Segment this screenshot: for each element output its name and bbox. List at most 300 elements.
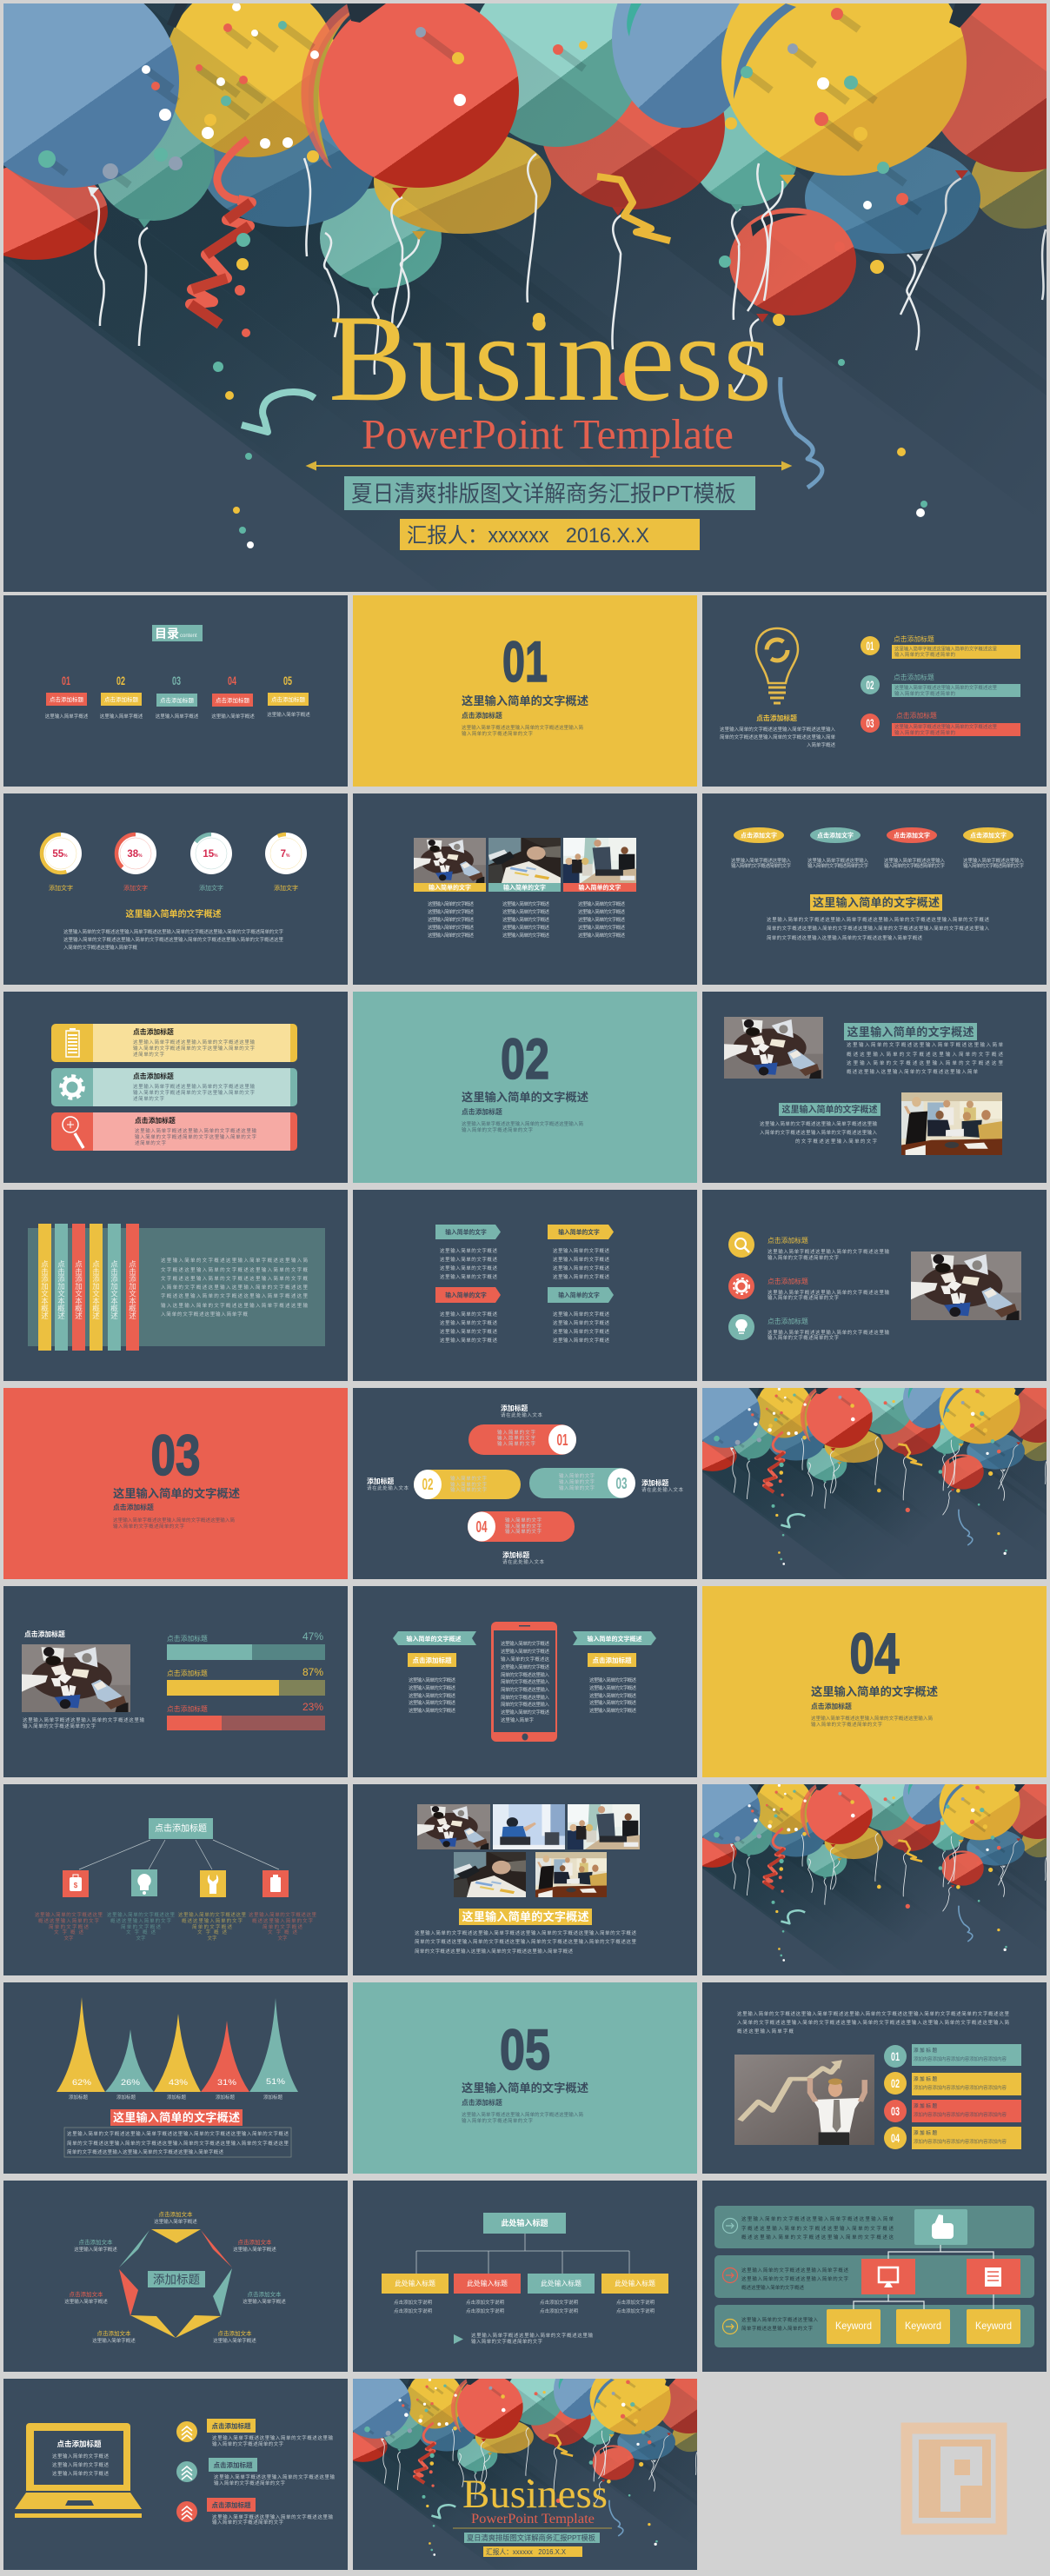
section text: 这里输入简单字概述这里输入简单的文字概述这里输入简 (462, 1120, 583, 1127)
strip 2: 点击添加文本概述 (57, 1260, 66, 1320)
peak 62%: 62% (72, 2078, 92, 2088)
body text: 入简单的文字概述这里输入简单字概 (161, 1311, 248, 1318)
label lower right: 点击添加文本 (247, 2290, 282, 2298)
tag group bottom left: 输入简单的文字 (445, 1291, 487, 1298)
item 03: 添加标题 (914, 2102, 937, 2109)
panel: contents slide (3, 595, 348, 787)
panel: icons with photo (702, 1190, 1047, 1381)
pill 01: 01 (556, 1431, 568, 1449)
laptop text (52, 2440, 109, 2477)
phone text: 这里输入简单的文字概述 (501, 1663, 549, 1670)
tag group bottom right: 输入简单的文字 (558, 1291, 600, 1298)
subtitle banner: 夏日清爽排版图文详解商务汇报PPT模板 (351, 481, 736, 507)
box 1: 点击添加文字说明 (394, 2299, 432, 2306)
item 1: 点击添加标题 (212, 2421, 251, 2430)
bar 47%: 47% (302, 1630, 323, 1643)
arrow circle 3 (723, 2319, 737, 2334)
pill 02 (414, 1470, 521, 1499)
item 03 (884, 2100, 1021, 2122)
ring 7%: 7% (281, 849, 290, 860)
strip 4 (90, 1224, 103, 1351)
phone text: 这里输入简单的文字概述 (501, 1648, 549, 1655)
panel: balloon divider 2 (688, 1767, 1050, 1975)
panel: three photos (353, 793, 697, 985)
oval item 1: 这里输入简单字概述这里输入 (731, 857, 791, 864)
oval item 3: 输入简单的文字概述简单的文字 (884, 862, 945, 869)
text column 4: 文字概述 (268, 1929, 297, 1935)
list item 2: 点击添加标题 (894, 673, 934, 681)
strip 6 (126, 1224, 139, 1351)
label left (367, 1477, 409, 1491)
icon: gear (61, 1076, 83, 1099)
text column 1: 文字 (63, 1935, 74, 1942)
panel: two photos with text (702, 992, 1047, 1183)
closing divider (453, 2527, 612, 2529)
arrow circle 1 (723, 2218, 737, 2234)
label lower right: 这里输入简单字概述 (243, 2298, 286, 2305)
peak 26%: 添加标题 (116, 2094, 136, 2101)
keyword box 3 (967, 2309, 1020, 2344)
list item 2: 02 (866, 678, 874, 692)
list item 3: 这里输入简单字概述这里输入简单的文字概述这里 (894, 723, 997, 730)
list item 3 (861, 711, 1020, 736)
closing subtitle: PowerPoint Template (471, 2512, 595, 2526)
section text: 输入简单的文字概述简单的文字 (462, 2117, 533, 2124)
contents item 4: 这里输入简单字概述 (211, 713, 255, 720)
closing title: Business (462, 2472, 608, 2517)
contents heading: 目录 (155, 627, 179, 641)
icon: light bulb (756, 628, 798, 703)
arrow marker (454, 2334, 463, 2344)
phone text: 简单的文字概述这里输入 (501, 1694, 549, 1701)
contents item 5: 这里输入简单字概述 (267, 711, 310, 718)
panel: three cards (3, 992, 348, 1183)
item 02: 添加标题 (914, 2075, 937, 2082)
row text 1: 字概述这里输入简单的文字概述这里输入简单的文字概述 (741, 2225, 894, 2232)
contents item 2: 这里输入简单字概述 (100, 713, 143, 720)
connector lines (416, 2234, 629, 2274)
title: Business (329, 289, 772, 427)
photo column 1 (414, 838, 486, 939)
body text 2: 这里输入简单的文字概述这里输入简单字概述这里输 (760, 1120, 877, 1127)
tag group bottom left: 这里输入简单的文字概述 (440, 1328, 497, 1335)
body text (415, 1929, 636, 1955)
item 2: 点击添加标题 (768, 1277, 808, 1285)
box 4: 点击添加文字说明 (616, 2299, 655, 2306)
label top: 请在此处输入文本 (501, 1411, 542, 1418)
row text 3: 简单字概述这里输入简单的文字 (741, 2325, 813, 2332)
item 04: 添加内容添加内容添加内容添加内容添加内容 (914, 2138, 1007, 2145)
item 04: 04 (891, 2131, 900, 2145)
item 04 (884, 2127, 1021, 2149)
body text (767, 916, 989, 941)
list item 3: 输入简单的文字概述简单的 (894, 729, 955, 736)
item 3: 这里输入简单字概述这里输入简单的文字概述这里输 (768, 1329, 889, 1336)
keyword box 1 (827, 2309, 881, 2344)
text column 2: 文字概述 (126, 1929, 156, 1935)
item 1: 输入简单的文字概述简单的文字 (768, 1254, 839, 1261)
tag group top right: 这里输入简单的文字概述 (553, 1265, 609, 1271)
star shape (119, 2229, 232, 2338)
text column 3 (178, 1911, 246, 1942)
ring 7% (265, 833, 307, 874)
panel: org chart (353, 2181, 697, 2372)
contents item 2 (100, 674, 143, 720)
presenter banner (400, 519, 700, 550)
body text: 入简单的文字概述这里输入简单字概 (63, 944, 137, 951)
top box (149, 1818, 213, 1839)
body text: 这里输入简单的文字概述这里输入简单的文字概述这里输入简单的文字概述这里输入简单的文字概述这里 (63, 936, 283, 943)
oval item 1: 输入简单的文字概述简单的文字 (731, 862, 791, 869)
item 02: 添加内容添加内容添加内容添加内容添加内容 (914, 2084, 1007, 2091)
body text: 简单的文字概述这里输入简单的文字概述这里输入简单的文字概述这里输入简单的文字概述这里输入 (767, 925, 989, 932)
item 02 (884, 2072, 1021, 2095)
body text (63, 928, 283, 951)
body text: 这里输入简单的文字概述这里输入简单字概述这里输入简单的文字概述这里输入简单的文字概述 (415, 1929, 636, 1936)
label upper left: 点击添加文本 (78, 2238, 113, 2246)
right ribbon: 输入简单的文字概述 (588, 1635, 641, 1643)
tag group bottom right: 这里输入简单的文字概述 (553, 1311, 609, 1318)
panel: four pills (353, 1388, 697, 1579)
photo column 3: 这里输入简单的文字概述 (578, 924, 625, 931)
strip 2 (55, 1224, 68, 1351)
body text: 概述这里输入简单的文字概述这里输入简单的文字概述 (847, 1051, 1003, 1058)
right ribbon (573, 1631, 656, 1645)
arrow divider (308, 462, 790, 469)
label bottom right: 这里输入简单字概述 (213, 2337, 256, 2344)
panel: closing slide (339, 2361, 763, 2570)
body text: 简单的文字概述这里输入这里输入简单的文字概述这里输入简单字概述 (415, 1948, 573, 1955)
arrow circle 2 (723, 2268, 737, 2282)
panel: section 05 (353, 1982, 697, 2174)
right column: 这里输入简单的文字概述 (589, 1707, 636, 1714)
section text (811, 1715, 933, 1728)
photo column 1: 这里输入简单的文字概述 (428, 924, 474, 931)
photo: meeting table (911, 1251, 1021, 1320)
laptop text: 这里输入简单的文字概述 (52, 2461, 109, 2468)
text column 3: 这里输入简单的文字概述这里 (178, 1911, 246, 1918)
strip 6: 点击添加文本概述 (129, 1260, 137, 1320)
text column 4: 概述这里输入简单的文字 (252, 1917, 313, 1924)
row text 2 (741, 2267, 848, 2291)
card 1: 输入简单的文字概述简单的文字这里输入简单的文字 (133, 1045, 255, 1052)
contents item 5: 点击添加标题 (271, 695, 306, 703)
section heading: 这里输入简单的文字概述 (811, 1684, 938, 1698)
box 1: 点击添加文字说明 (394, 2307, 432, 2314)
item 3: 输入简单的文字概述简单的文字 (212, 2519, 283, 2526)
oval item 2: 这里输入简单字概述这里输入 (807, 857, 868, 864)
card 3: 述简单的文字 (135, 1139, 166, 1146)
phone text: 简单的文字概述这里输入 (501, 1678, 549, 1685)
left column: 这里输入简单的文字概述 (409, 1699, 455, 1706)
item 02: 02 (891, 2076, 900, 2090)
text column 3: 简单的文字概述 (192, 1923, 232, 1930)
photo text: 输入简单的文字概述简单的文字 (23, 1723, 96, 1730)
item 01: 添加标题 (914, 2047, 937, 2054)
panel: percentage rings (3, 793, 348, 985)
section text: 这里输入简单字概述这里输入简单的文字概述这里输入简 (113, 1517, 235, 1524)
item 3 (728, 1314, 889, 1341)
footnote text: 这里输入简单字概述这里输入简单的文字概述这里输 (471, 2332, 593, 2339)
icon box: money bag (63, 1870, 89, 1897)
heading banner: 这里输入简单的文字概述 (813, 896, 940, 909)
section text (462, 2111, 583, 2124)
list item 2: 这里输入简单字概述这里输入简单的文字概述这里 (894, 684, 997, 691)
label bottom: 添加标题 (502, 1550, 529, 1559)
icon box: bulb (131, 1869, 157, 1896)
body text: 简单的文字概述这里输入这里输入简单的文字概述这里输入简单字概述 (767, 934, 922, 941)
left column: 这里输入简单的文字概述 (409, 1692, 455, 1699)
body text: 这里输入简单的文字概述这里输入简单字概述这里输入简 (161, 1257, 308, 1264)
peak 26%: 26% (121, 2078, 141, 2088)
panel: star diagram (3, 2181, 348, 2372)
peak 51% (249, 1998, 298, 2101)
section text: 输入简单的文字概述简单的文字 (462, 1126, 533, 1133)
section heading: 这里输入简单的文字概述 (462, 2081, 588, 2095)
list item 2: 输入简单的文字概述简单的 (894, 690, 955, 697)
pill 03 (529, 1468, 635, 1498)
panel: phone (353, 1586, 697, 1777)
item 3: 点击添加标题 (768, 1317, 808, 1325)
phone text: 简单的文字概述这里输入 (501, 1671, 549, 1678)
peak 31% (201, 2021, 249, 2101)
oval item 4: 点击添加文字 (970, 831, 1007, 840)
center label: 添加标题 (153, 2274, 200, 2286)
peak 43% (154, 2014, 201, 2101)
label bottom left (92, 2329, 136, 2344)
list item 1: 这里输入简单字概述这里输入简单的文字概述这里 (894, 645, 997, 652)
text column 4: 这里输入简单的文字概述这里 (249, 1911, 316, 1918)
pill 01: 输入简单的文字 (497, 1434, 535, 1441)
outlined text box: 简单的文字概述这里输入简单的文字概述这里输入简单的文字概述这里输入简单的文字概述这里 (67, 2140, 289, 2147)
item 2: 这里输入简单字概述这里输入简单的文字概述这里输 (768, 1289, 889, 1296)
strip 4: 点击添加文本概述 (92, 1260, 101, 1320)
left ribbon (393, 1631, 476, 1645)
section heading: 这里输入简单的文字概述 (462, 1090, 588, 1104)
ring 55%: 55% (52, 849, 68, 860)
icon box: battery (262, 1870, 289, 1897)
tag group top right: 输入简单的文字 (558, 1228, 600, 1236)
body text 2 (760, 1120, 877, 1145)
pill 04: 输入简单的文字 (505, 1517, 542, 1524)
card 1: 点击添加标题 (133, 1027, 174, 1036)
pill 02: 02 (422, 1476, 433, 1493)
label bottom right (213, 2329, 256, 2344)
section subheading: 点击添加标题 (113, 1503, 154, 1511)
text column 1: 这里输入简单的文字概述这里 (35, 1911, 103, 1918)
pill 03: 03 (615, 1475, 628, 1492)
keyword box 1: Keyword (835, 2320, 872, 2332)
bar 87%: 点击添加标题 (167, 1669, 208, 1677)
icon box: money bag: $ (74, 1882, 78, 1889)
item 1: 点击添加标题 (768, 1236, 808, 1245)
thumb box (914, 2209, 967, 2245)
box 1: 此处输入标题 (395, 2279, 435, 2287)
box 2 (454, 2274, 521, 2314)
body text: 文字概述这里输入简单的文字概述这里输入简单的文字概 (161, 1266, 308, 1273)
body text 2: 的文字概述这里输入简单的文字 (795, 1138, 877, 1145)
label upper right: 这里输入简单字概述 (233, 2246, 276, 2253)
ring labels: 添加文字 (49, 884, 73, 892)
panel: laptop (3, 2379, 348, 2570)
label upper right: 点击添加文本 (238, 2238, 272, 2246)
left column: 这里输入简单的文字概述 (409, 1684, 455, 1691)
photo column 2: 这里输入简单的文字概述 (502, 900, 549, 907)
heading banner: 这里输入简单的文字概述 (113, 2111, 240, 2124)
contents item 5: 05 (283, 674, 292, 687)
label right: 添加标题 (641, 1478, 668, 1487)
bulb text: 这里输入简单的文字概述这里输入简单字概述这里输入 (720, 726, 835, 733)
strip 5: 点击添加文本概述 (110, 1260, 118, 1320)
body text (161, 1257, 308, 1318)
photo column 2: 这里输入简单的文字概述 (502, 924, 549, 931)
icon box: wrench (200, 1870, 226, 1897)
panel: vertical strips (3, 1190, 348, 1381)
label lower left (64, 2290, 108, 2305)
bulb text (720, 726, 835, 748)
card 2: 述简单的文字 (133, 1095, 164, 1102)
label upper right (233, 2238, 276, 2253)
strip 3: 点击添加文本概述 (75, 1260, 83, 1320)
peak 31%: 31% (217, 2078, 237, 2088)
item 2 (176, 2458, 335, 2486)
item 04: 添加标题 (914, 2129, 937, 2136)
section number: 03 (151, 1423, 200, 1487)
heading banner: 这里输入简单的文字概述 (847, 1026, 974, 1039)
tag group top left: 这里输入简单的文字概述 (440, 1265, 497, 1271)
hero balloon illustration (0, 0, 1050, 592)
caption: 点击添加标题 (24, 1630, 65, 1638)
keyword box 2 (896, 2309, 950, 2344)
tag group bottom left (435, 1287, 501, 1344)
left column (408, 1653, 456, 1714)
label right (641, 1478, 683, 1493)
peak 62% (56, 1997, 105, 2101)
item 1: 输入简单的文字概述简单的文字 (212, 2440, 283, 2447)
closing balloon illustration (339, 2361, 763, 2570)
oval item 2 (807, 827, 868, 869)
section subheading: 点击添加标题 (462, 711, 502, 720)
section text: 输入简单的文字概述简单的文字 (113, 1523, 184, 1530)
pill 02: 输入简单的文字 (450, 1481, 487, 1488)
pill 02: 输入简单的文字 (450, 1475, 487, 1482)
strip 5 (108, 1224, 121, 1351)
oval item 4: 输入简单的文字概述简单的文字 (963, 862, 1024, 869)
ring 55% (40, 833, 82, 874)
strip 1: 点击添加文本概述 (40, 1260, 49, 1320)
photo column 2 (488, 838, 561, 939)
item 1: 这里输入简单字概述这里输入简单的文字概述这里输 (212, 2434, 333, 2441)
left column: 点击添加标题 (412, 1656, 452, 1664)
section text: 这里输入简单字概述这里输入简单的文字概述这里输入简 (811, 1715, 933, 1722)
top box (483, 2213, 566, 2234)
label right: 请在此处输入文本 (641, 1486, 683, 1493)
card 1 (51, 1024, 297, 1062)
section text: 这里输入简单字概述这里输入简单的文字概述这里输入简 (462, 724, 583, 731)
card 3 (51, 1112, 297, 1151)
tag group top right: 这里输入简单的文字概述 (553, 1247, 609, 1254)
peak 51%: 51% (266, 2077, 286, 2087)
row text 1: 这里输入简单的文字概述这里输入简单字概述这里输入简单 (741, 2215, 894, 2222)
left column: 这里输入简单的文字概述 (409, 1707, 455, 1714)
oval item 3: 点击添加文字 (894, 831, 930, 840)
document box (967, 2259, 1020, 2294)
pill 01 (469, 1424, 576, 1455)
card 2 (51, 1068, 297, 1106)
phone text: 简单的文字概述这里输入 (501, 1686, 549, 1693)
peak 26% (105, 2029, 154, 2101)
body text: 入简单的文字概述这里输入这里输入简单的文字概述这里 (161, 1284, 308, 1291)
item 03: 03 (891, 2104, 900, 2118)
center label (148, 2271, 205, 2287)
photo: meeting table (22, 1644, 130, 1712)
item 01: 01 (891, 2049, 900, 2063)
section text (113, 1517, 235, 1530)
list item 1: 01 (866, 639, 874, 653)
box 2: 此处输入标题 (467, 2279, 508, 2287)
panel: section 04 (702, 1586, 1047, 1777)
panel: four ovals (702, 793, 1047, 985)
peak 43%: 添加标题 (167, 2094, 186, 2101)
pill 02: 输入简单的文字 (450, 1486, 487, 1493)
photo column 2: 输入简单的文字 (503, 883, 546, 892)
item 03: 添加内容添加内容添加内容添加内容添加内容 (914, 2111, 1007, 2118)
text column 2 (107, 1911, 175, 1942)
contents item 4: 点击添加标题 (216, 696, 250, 704)
list item 1: 输入简单的文字概述简单的 (894, 651, 955, 658)
bulb caption: 点击添加标题 (756, 714, 797, 722)
panel: peak chart (3, 1982, 348, 2174)
contents item 1 (45, 674, 89, 720)
keyword box 3: Keyword (975, 2320, 1012, 2332)
strip 1 (38, 1224, 51, 1351)
item 3: 点击添加标题 (212, 2500, 251, 2509)
bar 87%: 87% (302, 1666, 323, 1678)
item 1 (176, 2419, 333, 2447)
intro text (737, 2010, 1009, 2035)
card 3: 点击添加标题 (135, 1116, 176, 1125)
icon: phone (491, 1622, 557, 1742)
item 2: 输入简单的文字概述简单的文字 (768, 1294, 839, 1301)
pill 04 (468, 1511, 575, 1542)
contents item 5 (267, 674, 310, 718)
ring labels: 添加文字 (123, 884, 148, 892)
text column 4: 文字 (277, 1935, 288, 1942)
section heading: 这里输入简单的文字概述 (462, 694, 588, 707)
outlined text box: 简单的文字概述这里输入这里输入简单的文字概述这里输入简单字概述 (67, 2148, 223, 2155)
section text: 输入简单的文字概述简单的文字 (811, 1721, 882, 1728)
section number: 04 (850, 1621, 900, 1685)
ring 38%: 38% (127, 849, 143, 860)
panel: org tree icons (3, 1784, 348, 1975)
label upper left: 这里输入简单字概述 (74, 2246, 117, 2253)
text column 3: 文字 (207, 1935, 217, 1942)
presenter banner: 汇报人：xxxxxx 2016.X.X (407, 524, 649, 548)
text column 1: 文字概述 (54, 1929, 83, 1935)
footnote text: 输入简单的文字概述简单的文字 (471, 2338, 542, 2345)
item 1 (728, 1232, 889, 1261)
phone text (501, 1640, 549, 1723)
right column: 这里输入简单的文字概述 (589, 1684, 636, 1691)
photo column 3: 这里输入简单的文字概述 (578, 900, 625, 907)
tag group top left: 这里输入简单的文字概述 (440, 1273, 497, 1280)
heading banner: 这里输入简单的文字概述 (462, 1910, 589, 1923)
peak 31%: 添加标题 (216, 2094, 235, 2101)
label lower left: 点击添加文本 (70, 2290, 103, 2298)
card 2: 输入简单的文字概述简单的文字这里输入简单的文字 (133, 1089, 255, 1096)
item 2 (728, 1273, 889, 1301)
card 1: 这里输入简单字概述这里输入简单的文字概述这里输 (133, 1039, 255, 1046)
